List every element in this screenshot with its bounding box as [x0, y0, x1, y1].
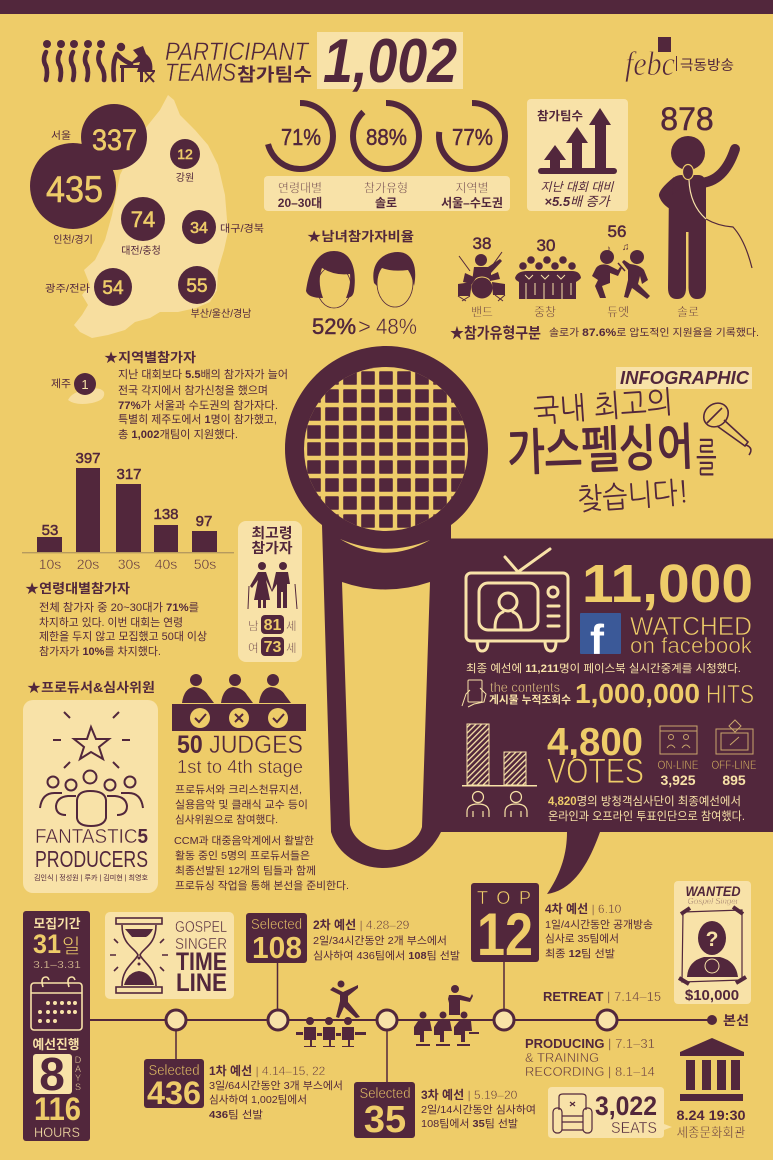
circle: Gwangju 54: 54 [102, 278, 124, 299]
panel: seats callout: 3,022 [595, 1091, 657, 1121]
text: judges description: CCM과 대중음악계에서 활발한 [174, 834, 314, 847]
logo: febc: febc [625, 46, 675, 83]
panel: teams increase: 지난 대회 대비 [541, 180, 614, 194]
icon: elderly couple [248, 562, 297, 609]
circle: Daejeon 74 [121, 197, 165, 241]
ring: 77%: 77% [452, 124, 493, 150]
solo performer figure [659, 101, 752, 299]
stat: 1,000,000 hits: 게시물 누적조회수 [489, 693, 571, 706]
panel: gospel singer timeline title: LINE [176, 969, 227, 997]
stat: 4,800 votes: 4,800 [547, 721, 643, 764]
text: judges description: 활동 중인 5명의 프로듀서들은 [175, 849, 310, 862]
badge: selected 108 [246, 913, 307, 965]
stat: 1,000,000 hits: HITS [706, 679, 754, 709]
text: judges description: 심사위원으로 참여했다. [175, 813, 278, 826]
panel: recruiting and preliminaries [23, 911, 90, 1141]
text: final venue: 8.24 19:30 [676, 1107, 746, 1123]
off-line votes: OFF-LINE [712, 758, 756, 772]
circle: Incheon Gyeonggi 435: 435 [46, 169, 103, 210]
panel: recruiting and preliminaries: S [75, 1082, 81, 1092]
logo: febc [625, 37, 734, 83]
icon: hand on tablet [462, 680, 486, 707]
logo: febc: 극동방송 [680, 57, 734, 73]
icon: facebook [580, 613, 621, 663]
title: participant teams: 참가팀수 [237, 65, 312, 85]
title: participant teams: TEAMS [165, 59, 236, 87]
off-line votes: 895 [722, 772, 746, 788]
bar chart: age groups: 50s [194, 556, 216, 572]
panel: teams increase: 참가팀수 [537, 108, 583, 123]
icon: band drummer: 38 [473, 234, 491, 253]
title: participant teams: PARTICIPANT [165, 38, 310, 66]
text: round 4: 최종 12팀 선발 [545, 948, 615, 960]
text: round 4: 1일/4시간동안 공개방송 [545, 918, 653, 931]
age: female 73: 세 [286, 642, 297, 655]
panel: recruiting and preliminaries: HOURS [34, 1124, 80, 1140]
circle: Daegu 34 [182, 210, 216, 244]
participation type caption [450, 325, 759, 342]
icon: facebook: f [590, 616, 605, 663]
section: gender ratio: 48% [376, 314, 417, 339]
panel: wanted poster: $10,000 [685, 987, 739, 1004]
text: regional participants: 지난 대회보다 5.5배의 참가자가 늘어 [118, 368, 288, 381]
panel: recruiting and preliminaries: 모집기간 [34, 916, 81, 931]
badge: selected 436: Selected [148, 1062, 200, 1079]
icon: small microphone [699, 398, 751, 455]
icon: concert hall [680, 1038, 744, 1101]
panel: wanted poster: WANTED [686, 883, 740, 899]
panel: judges desk [172, 674, 306, 777]
panel: gospel singer timeline title [105, 912, 234, 999]
panel: judges desk: 50 JUDGES [177, 731, 303, 759]
text: round 3 [421, 1088, 536, 1130]
region labels: 광주/전라 [45, 283, 90, 295]
icon: queue of participants [43, 40, 155, 82]
ring: 88%: 참가유형 [364, 181, 408, 195]
text: producing and recording [525, 1036, 655, 1079]
stat: 11,000 watched: WATCHED [630, 611, 752, 641]
text: round 2: 2일/34시간동안 2개 부스에서 [313, 934, 447, 947]
panel: fantastic 5 producers: PRODUCERS [35, 846, 148, 872]
region labels: 대구/경북 [220, 222, 264, 235]
circle: Seoul 337: 337 [92, 124, 137, 157]
circle: Incheon Gyeonggi 435 [30, 143, 116, 229]
text: producing and recording: RECORDING | 8.1–14 [525, 1064, 655, 1079]
text: round 3: 2일/14시간동안 심사하여 [421, 1103, 536, 1116]
section: participation types [450, 222, 759, 342]
bar chart: age groups: 138 [153, 506, 179, 523]
bar chart: age groups: 317 [116, 466, 142, 483]
icon: duet [592, 222, 650, 319]
panel: fantastic 5 producers: FANTASTIC5 [35, 826, 148, 848]
ring: 88%: 솔로 [375, 196, 397, 210]
icon: conductor with seated team [414, 985, 479, 1046]
icon: man head [373, 252, 415, 307]
badge: selected 108: Selected [251, 916, 302, 933]
section: participation types: 솔로 [677, 305, 699, 319]
ring: 71%: 연령대별 [278, 181, 322, 195]
icon: hourglass [110, 918, 168, 993]
ring: 77%: 서울–수도권 [441, 196, 503, 210]
bar chart: age groups: 53 [42, 522, 58, 539]
text: producing and recording: & TRAINING [525, 1050, 599, 1065]
off-line votes [712, 720, 756, 788]
panel: gospel singer timeline title: SINGER [175, 936, 227, 953]
text: regional participants: 77%가 서울과 수도권의 참가자다. [118, 399, 278, 412]
timeline line and nodes: 본선 [723, 1013, 749, 1028]
badge: selected 35: Selected [360, 1085, 410, 1102]
circle: Busan 55 [178, 266, 216, 304]
panel: recruiting and preliminaries: 8 [39, 1048, 65, 1100]
text: round 4: 심사로 35팀에서 [545, 933, 619, 945]
region labels: 강원 [176, 172, 194, 184]
infographic badge: INFOGRAPHIC [620, 368, 750, 388]
icon: duet: ♪ [606, 244, 611, 255]
panel: recruiting and preliminaries: 31 [33, 929, 61, 959]
headline lettering: 국내 최고의 [532, 386, 674, 427]
text: age participants: 전체 참가자 중 20~30대가 71%를 [39, 601, 199, 614]
stat: 1,000,000 hits: 1,000,000 [575, 678, 700, 709]
badge: top 12: 12 [477, 901, 533, 968]
circle: Gwangju 54 [94, 268, 132, 306]
bar chart: age groups: 10s [39, 556, 61, 572]
stat: 1,000,000 hits [462, 678, 754, 709]
text: regional participants [104, 350, 288, 441]
icon: duet: 56 [608, 222, 626, 241]
text: round 2: 심사하여 436팀에서 108팀 선발 [313, 949, 460, 962]
panel: teams increase: ×5.5배 증가 [544, 194, 612, 209]
badge: selected 436 [144, 1059, 204, 1111]
age: male 81: 남 [248, 620, 259, 633]
panel: oldest participants: 최고령 [252, 525, 292, 541]
text: regional participants: 총 1,002개팀이 지원했다. [118, 428, 238, 441]
circle: Busan 55: 55 [186, 276, 208, 297]
panel: gospel singer timeline title: TIME [176, 948, 227, 976]
jeju island: 제주 [51, 378, 71, 390]
text: final venue: 세종문화회관 [676, 1125, 746, 1140]
text: judges description [174, 784, 349, 892]
region labels: 부산/울산/경남 [191, 307, 251, 320]
big microphone and speech panel [285, 346, 773, 894]
panel: recruiting and preliminaries: 일 [62, 935, 80, 958]
badge: selected 108: 108 [252, 930, 302, 965]
headline lettering [507, 386, 717, 515]
panel: teams increase [527, 99, 628, 211]
participation type caption: 솔로가 87.6% 로 압도적인 지원율을 기록했다. [549, 326, 759, 339]
ring: 71%: 20–30대 [278, 196, 322, 210]
jeju island [51, 373, 104, 404]
ring charts [264, 103, 510, 211]
badge: selected 35 [354, 1082, 415, 1141]
age: male 81: 81 [264, 617, 282, 634]
region labels [45, 130, 264, 320]
participation type caption: ★참가유형구분 [450, 325, 541, 342]
text: retreat: RETREAT | 7.14–15 [543, 989, 661, 1004]
stat: 4,800 votes [547, 720, 756, 823]
solo performer figure: 878 [660, 101, 714, 137]
korea map with region circles [30, 95, 264, 338]
panel: recruiting and preliminaries: D [75, 1055, 82, 1065]
ring: 88%: 88% [366, 124, 407, 150]
icon: choir: 중창 [534, 305, 556, 319]
panel: seats callout: SEATS [611, 1120, 657, 1137]
bar chart: age groups: 20s [77, 556, 99, 572]
headline lettering: 찾습니다! [576, 476, 690, 515]
stat: 11,000 watched: on facebook [630, 633, 753, 658]
jeju island: 1 [81, 377, 89, 392]
on-line votes: 3,925 [660, 772, 696, 788]
age: male 81 [248, 615, 297, 634]
stat: 11,000 watched: 11,000 [582, 554, 753, 614]
panel: recruiting and preliminaries: Y [75, 1073, 81, 1083]
stat: 11,000 watched: 최종 예선에 11,211명이 페이스북 실시간중계를 시청했다. [466, 662, 741, 675]
panel: wanted poster: Gospel Singer [688, 897, 739, 906]
text: round 1: 심사하여 1,002팀에서 [209, 1093, 307, 1106]
mic highlight [340, 539, 430, 553]
stat: 4,800 votes: 온라인과 오프라인 투표인단으로 참여했다. [548, 810, 745, 823]
text: round 3: 3차 예선 | 5.19–20 [421, 1088, 518, 1102]
badge: selected 436: 436 [147, 1075, 201, 1111]
circle: Daejeon 74: 74 [131, 207, 155, 232]
icon: band drummer [458, 234, 505, 319]
circle: Daegu 34: 34 [190, 220, 208, 237]
age: female 73: 73 [264, 639, 282, 656]
age: female 73: 여 [248, 642, 259, 655]
text: round 1: 3일/64시간동안 3개 부스에서 [209, 1079, 343, 1092]
text: round 3: 108팀에서 35팀 선발 [421, 1118, 518, 1130]
icon: choir: 30 [537, 236, 555, 255]
text: judges description: 프로듀서와 크리스천뮤지션, [175, 784, 302, 796]
stat: 11,000 watched [466, 554, 753, 675]
text: round 1 [209, 1064, 343, 1121]
text: regional participants: 특별히 제주도에서 1명이 참가했고, [118, 412, 277, 426]
text: age participants: 참가자가 10%를 차지했다. [39, 645, 161, 658]
icon: star and people [40, 712, 143, 826]
bar chart: age groups [22, 450, 234, 572]
circle: Gangwon 12: 12 [177, 146, 193, 162]
panel: wanted poster: ? [706, 928, 718, 951]
ring: 71%: 71% [281, 124, 321, 150]
text: judges description: 프로듀싱 작업을 통해 본선을 준비한다. [175, 879, 349, 892]
ring: 77%: 지역별 [455, 181, 489, 195]
text: round 1: 1차 예선 | 4.14–15, 22 [209, 1064, 326, 1078]
circle: Seoul 337 [81, 104, 147, 170]
text: round 1: 436팀 선발 [209, 1109, 263, 1121]
icon: choir [515, 236, 581, 319]
stat: 4,800 votes: 4,820명의 방청객심사단이 최종예선에서 [548, 795, 741, 808]
panel: seats callout [548, 1087, 672, 1138]
section: gender ratio: ★남녀참가자비율 [307, 229, 414, 244]
badge: selected 35: 35 [364, 1099, 406, 1141]
text: age participants [25, 581, 207, 658]
icon: duet: ♫ [622, 242, 630, 253]
heading: producers and judges: ★프로듀서&심사위원 [27, 680, 155, 695]
region labels: 서울 [51, 130, 71, 142]
headline lettering: 를 [696, 437, 717, 478]
text: round 2: 2차 예선 | 4.28–29 [313, 918, 410, 932]
text: producing and recording: PRODUCING | 7.1–31 [525, 1036, 655, 1051]
panel: recruiting and preliminaries: A [75, 1064, 81, 1074]
stat: 1,000,000 hits: the contents [490, 679, 560, 695]
panel: gospel singer timeline title: GOSPEL [175, 919, 227, 936]
stat: 4,800 votes: VOTES [547, 752, 644, 791]
panel: judges desk: 1st to 4th stage [177, 757, 303, 777]
title: participant teams [165, 38, 312, 87]
on-line votes [658, 726, 698, 788]
big total: 1,002: 1,002 [323, 27, 457, 96]
age: female 73 [248, 637, 297, 656]
ring: 71% [267, 103, 333, 210]
section: gender ratio: > [358, 314, 371, 339]
panel: fantastic 5 producers: 김인식 | 정성원 | 루카 | 김미현 | 최영호 [34, 873, 149, 882]
mic handle opening [342, 582, 430, 850]
icon: duet: 듀엣 [607, 305, 629, 319]
headline lettering: 가스펠싱어 [507, 422, 694, 478]
icon: calendar [31, 977, 82, 1030]
mic grille [304, 367, 468, 531]
top bar [0, 0, 773, 14]
chart: vote bars [462, 724, 537, 817]
text: round 4 [545, 902, 653, 960]
timeline line and nodes [90, 962, 749, 1083]
icon: band drummer: 밴드 [471, 305, 493, 319]
region labels: 대전/충청 [121, 245, 161, 257]
panel: recruiting and preliminaries: 3.1–3.31 [33, 959, 81, 971]
text: regional participants: ★지역별참가자 [104, 350, 196, 365]
bar chart: age groups: 40s [155, 556, 177, 572]
text: final venue [676, 1107, 746, 1140]
bar chart: age groups: 30s [118, 556, 140, 572]
panel: fantastic 5 producers [23, 700, 158, 893]
age: male 81: 세 [286, 620, 297, 633]
badge: top 12: TOP [477, 888, 531, 908]
panel: recruiting and preliminaries: 예선진행 [32, 1037, 80, 1052]
bar chart: age groups: 97 [196, 513, 212, 530]
icon: singer with audition judges [296, 980, 366, 1047]
bar chart: age groups: 397 [75, 450, 101, 467]
panel: recruiting and preliminaries: 116 [34, 1091, 81, 1127]
region labels: 인천/경기 [53, 233, 93, 246]
text: round 4: 4차 예선 | 6.10 [545, 902, 622, 916]
panel: oldest participants: 참가자 [252, 540, 293, 556]
panel: oldest participants [238, 521, 302, 662]
ring: 77% [439, 103, 505, 210]
icon: armchair [553, 1094, 592, 1133]
icon: woman head [306, 251, 355, 308]
text: regional participants: 전국 각지에서 참가신청을 했으며 [118, 384, 268, 397]
badge: top 12 [471, 883, 539, 968]
panel: wanted poster [674, 881, 751, 1004]
text: age participants: ★연령대별참가자 [25, 581, 130, 596]
section: gender ratio [306, 229, 417, 339]
ring: 88% [353, 103, 419, 210]
text: age participants: 제한을 두지 않고 모집했고 50대 이상 [39, 630, 207, 643]
circle: Gangwon 12 [170, 139, 200, 169]
text: round 2 [313, 918, 460, 962]
section: gender ratio: 52% [312, 314, 356, 339]
text: judges description: 실용음악 및 클래식 교수 등이 [175, 799, 308, 811]
text: judges description: 최종선발된 12개의 팀들과 함께 [175, 865, 316, 877]
text: age participants: 차지하고 있다. 이번 대회는 연령 [39, 615, 183, 629]
on-line votes: ON-LINE [658, 758, 698, 772]
icon: television [466, 549, 568, 651]
